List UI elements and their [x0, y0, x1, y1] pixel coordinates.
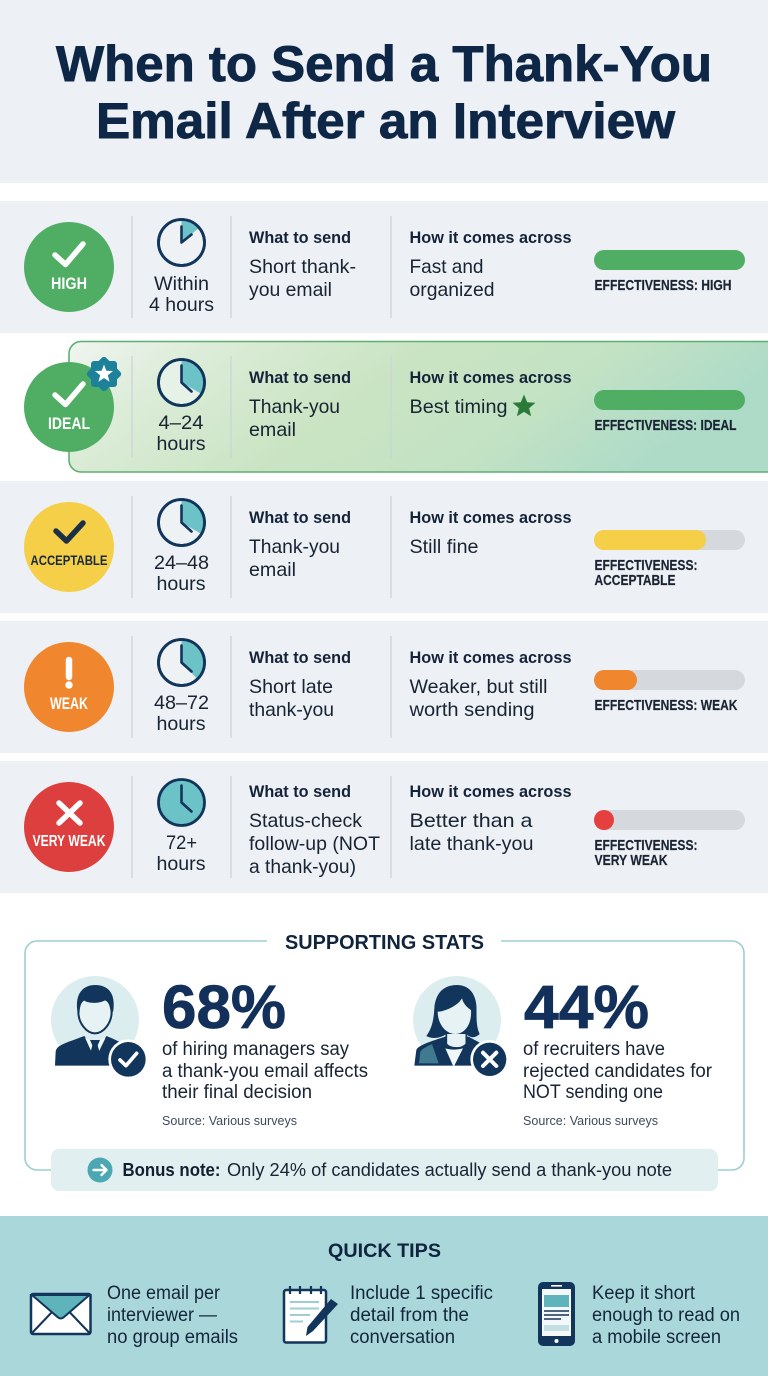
badge: weak — [24, 642, 114, 732]
badge: acceptable: ACCEPTABLE — [30, 552, 108, 568]
row: 24-48 hours — [0, 481, 768, 613]
what to send: short thank-you email: you email — [249, 279, 332, 301]
icon: clock 4-24 hours — [158, 360, 204, 406]
badge: ideal: IDEAL — [48, 415, 90, 433]
time: within 4 hours: 4 hours — [149, 294, 214, 316]
icon: clock 72+ hours — [158, 780, 204, 826]
what to send: thank-you email: email — [249, 559, 296, 581]
tip: include one specific detail: detail from the — [350, 1305, 469, 1326]
icon: recruiter — [413, 976, 509, 1079]
stat: 68 percent: of hiring managers say — [162, 1039, 349, 1060]
how it comes across: best timing: Best timing — [410, 396, 508, 418]
time: 4-24 hours — [156, 412, 206, 455]
what to send: thank-you email — [249, 368, 351, 441]
tip: keep it short: enough to read on — [592, 1305, 740, 1326]
effectiveness bar: acceptable — [594, 530, 745, 589]
time: 4-24 hours: 4–24 — [158, 412, 204, 434]
row: 48-72 hours — [0, 621, 768, 753]
icon: envelope — [31, 1294, 90, 1334]
time: 24-48 hours: hours — [156, 573, 206, 595]
icon: clock 48-72 hours — [158, 640, 204, 686]
how it comes across: better than a late thank-you: Better than a — [410, 810, 533, 832]
stat: 68 percent — [162, 973, 368, 1128]
badge: very weak — [24, 782, 114, 872]
time: 72+ hours: hours — [156, 853, 206, 875]
icon: hiring manager — [51, 976, 148, 1079]
time: 24-48 hours: 24–48 — [154, 552, 209, 574]
what to send: thank-you email: email — [249, 419, 296, 441]
tip: one email per interviewer: interviewer — — [107, 1305, 217, 1326]
what to send: short late thank-you: What to send — [249, 648, 351, 667]
panel: quick tips — [0, 1216, 768, 1376]
stat: 68 percent: their final decision — [162, 1082, 312, 1103]
stat: 44 percent: rejected candidates for — [523, 1061, 713, 1082]
what to send: status-check follow-up: follow-up (NOT — [249, 833, 380, 855]
how it comes across: best timing — [410, 368, 572, 418]
effectiveness bar: very weak: VERY WEAK — [594, 852, 668, 869]
icon: clock within 4 hours — [158, 220, 204, 266]
time: within 4 hours: Within — [154, 273, 209, 295]
what to send: status-check follow-up: Status-check — [249, 810, 362, 832]
how it comes across: weaker but worth sending — [408, 648, 572, 721]
how it comes across: still fine: How it comes across — [410, 508, 572, 527]
title band: When to Send a Thank-You — [56, 36, 712, 92]
row: 4-24 hours (highlighted) — [24, 342, 768, 472]
how it comes across: still fine: Still fine — [410, 536, 478, 558]
how it comes across: fast and organized: organized — [410, 279, 494, 301]
how it comes across: fast and organized: Fast and — [410, 256, 484, 278]
what to send: short thank-you email — [249, 228, 356, 301]
icon: notepad and pen — [284, 1286, 338, 1342]
icon: clock 24-48 hours — [158, 500, 204, 546]
tip: keep it short: Keep it short — [592, 1283, 696, 1304]
time: 48-72 hours — [154, 692, 209, 735]
badge: high: HIGH — [51, 275, 87, 293]
how it comes across: weaker but worth sending: How it comes across — [410, 648, 572, 667]
tip: one email per interviewer: no group emails — [107, 1327, 238, 1348]
time: within 4 hours — [149, 273, 214, 316]
what to send: status-check follow-up: What to send — [249, 782, 351, 801]
what to send: thank-you email: What to send — [249, 508, 351, 527]
what to send: thank-you email: Thank-you — [249, 396, 340, 418]
tip: include one specific detail: Include 1 specific — [350, 1283, 493, 1304]
what to send: short late thank-you: Short late — [249, 676, 333, 698]
callout: bonus note: Bonus note: — [122, 1160, 220, 1180]
what to send: status-check follow-up: a thank-you) — [249, 856, 356, 878]
title band: Email After an Interview — [96, 93, 675, 149]
effectiveness bar: acceptable: EFFECTIVENESS: — [594, 557, 698, 574]
time: 72+ hours — [156, 832, 206, 875]
effectiveness bar: high — [594, 250, 745, 294]
badge: weak: WEAK — [50, 695, 88, 713]
tip: keep it short: a mobile screen — [592, 1327, 721, 1348]
effectiveness bar: weak: EFFECTIVENESS: WEAK — [594, 697, 738, 714]
how it comes across: still fine — [410, 508, 572, 558]
tip: keep it short — [592, 1283, 740, 1348]
how it comes across: better than a late thank-you: How it comes across — [410, 782, 572, 801]
effectiveness bar: very weak: EFFECTIVENESS: — [594, 837, 698, 854]
badge: high — [24, 222, 114, 312]
what to send: short late thank-you: thank-you — [249, 699, 334, 721]
tip: include one specific detail: conversation — [350, 1327, 455, 1348]
time: 48-72 hours: 48–72 — [154, 692, 209, 714]
heading: supporting stats: SUPPORTING STATS — [285, 932, 484, 954]
what to send: thank-you email — [249, 508, 351, 581]
effectiveness bar: acceptable: ACCEPTABLE — [594, 572, 676, 589]
callout: bonus note — [51, 1149, 718, 1191]
time: 72+ hours: 72+ — [166, 832, 197, 854]
stat: 44 percent: of recruiters have — [523, 1039, 665, 1060]
effectiveness bar: ideal — [594, 390, 745, 434]
stat: 44 percent: 44% — [524, 973, 649, 1041]
how it comes across: better than a late thank-you — [410, 782, 572, 855]
stat: 68 percent: 68% — [162, 973, 286, 1041]
stat: 44 percent: NOT sending one — [523, 1082, 663, 1103]
stat: 44 percent: Source: Various surveys — [523, 1114, 658, 1128]
how it comes across: fast and organized — [410, 228, 572, 301]
how it comes across: best timing: How it comes across — [410, 368, 572, 387]
what to send: short thank-you email: What to send — [249, 228, 351, 247]
stat: 68 percent: a thank-you email affects — [162, 1061, 368, 1082]
row: 72+ hours — [0, 761, 768, 893]
badge: acceptable — [24, 502, 114, 592]
panel: supporting stats — [25, 932, 744, 1191]
callout: bonus note: Only 24% of candidates actually send a thank-you note — [227, 1160, 672, 1180]
how it comes across: fast and organized: How it comes across — [410, 228, 572, 247]
how it comes across: better than a late thank-you: late thank-you — [410, 833, 534, 855]
title band — [0, 0, 768, 183]
what to send: status-check follow-up — [249, 782, 380, 878]
time: 4-24 hours: hours — [156, 433, 206, 455]
row: within 4 hours — [0, 201, 768, 333]
what to send: thank-you email: Thank-you — [249, 536, 340, 558]
heading: quick tips: QUICK TIPS — [328, 1241, 441, 1262]
stat: 44 percent — [523, 973, 713, 1128]
stat: 68 percent: Source: Various surveys — [162, 1114, 297, 1128]
badge: ideal — [24, 356, 122, 452]
tip: include one specific detail — [350, 1283, 493, 1348]
time: 24-48 hours — [154, 552, 209, 595]
what to send: short thank-you email: Short thank- — [249, 256, 356, 278]
icon: star rosette — [86, 356, 122, 392]
effectiveness bar: high: EFFECTIVENESS: HIGH — [594, 277, 732, 294]
icon: green star — [512, 394, 536, 416]
icon: mobile phone — [538, 1282, 575, 1346]
tip: one email per interviewer — [107, 1283, 238, 1348]
effectiveness bar: very weak — [594, 810, 745, 869]
badge: very weak: VERY WEAK — [32, 833, 106, 850]
time: 48-72 hours: hours — [156, 713, 206, 735]
effectiveness bar: ideal: EFFECTIVENESS: IDEAL — [594, 417, 736, 434]
tip: one email per interviewer: One email per — [107, 1283, 221, 1304]
what to send: short late thank-you — [249, 648, 351, 721]
effectiveness bar: weak — [594, 670, 745, 714]
how it comes across: weaker but worth sending: worth sending — [408, 699, 534, 721]
how it comes across: weaker but worth sending: Weaker, but still — [410, 676, 548, 698]
what to send: thank-you email: What to send — [249, 368, 351, 387]
